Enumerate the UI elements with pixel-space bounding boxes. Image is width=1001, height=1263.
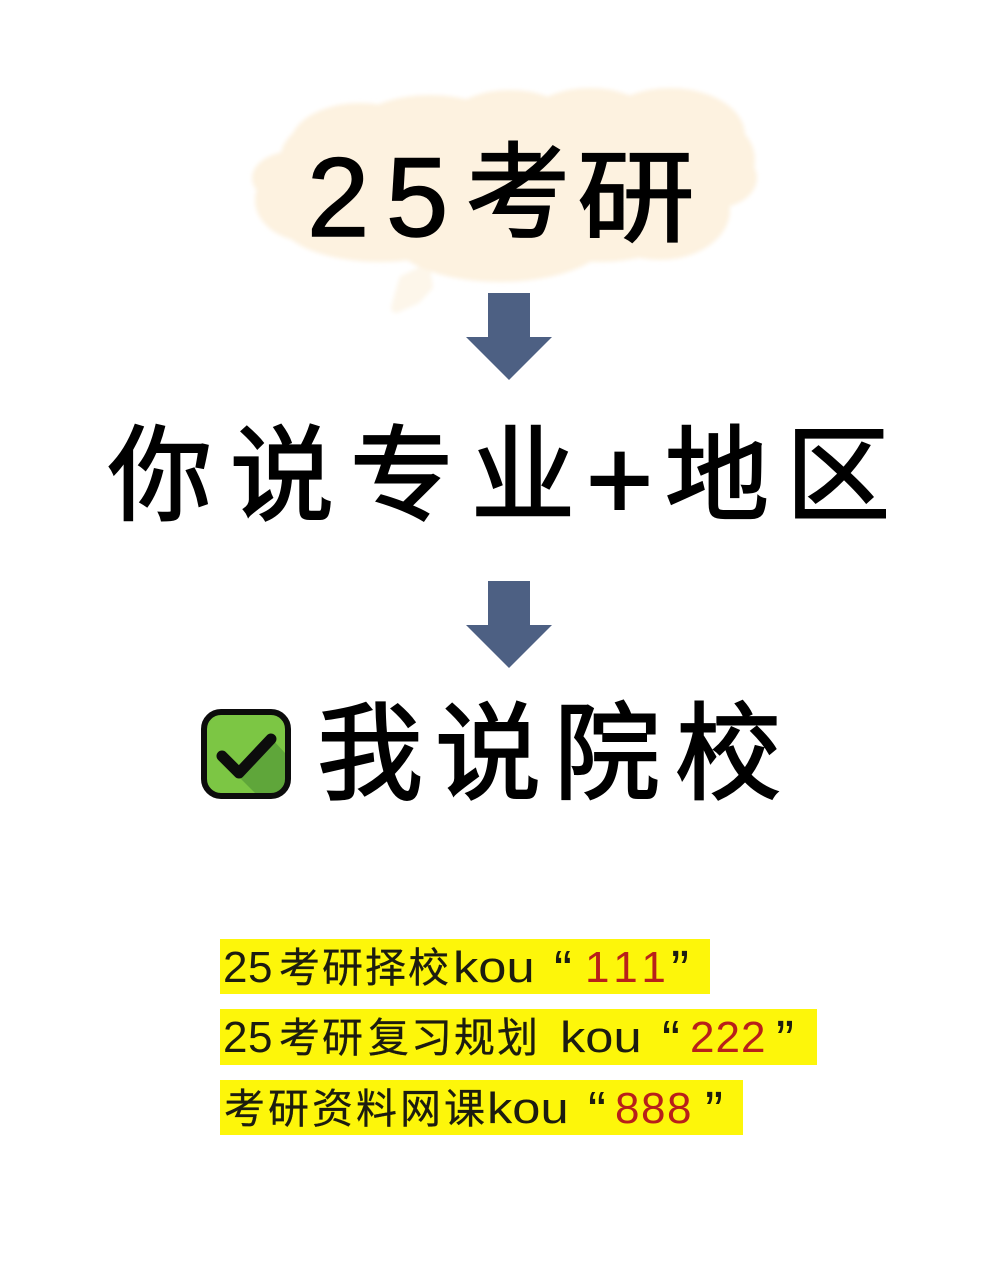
heading: I name schools: 院 xyxy=(554,696,660,814)
title: 5 xyxy=(386,135,448,260)
title: 2 xyxy=(307,135,369,260)
callout line 2: ” xyxy=(776,1010,794,1070)
callout line 1: 111 xyxy=(585,943,673,992)
heading: major and region: 专 xyxy=(350,419,454,535)
callout line 2 xyxy=(220,1009,817,1065)
heading: major and region xyxy=(108,416,890,544)
callout line 1: ” xyxy=(671,940,689,1000)
callout line 1: “ xyxy=(554,940,572,1000)
callout line 1: 考研择校 xyxy=(279,945,451,991)
callout line 3: “ xyxy=(588,1081,606,1141)
cloud background xyxy=(251,86,758,313)
heading: I name schools xyxy=(317,696,781,814)
callout line 1: kou xyxy=(453,943,535,992)
callout line 3: ” xyxy=(705,1081,723,1141)
callout line 3: kou xyxy=(487,1084,569,1133)
heading: major and region: + xyxy=(586,416,653,544)
callout line 2: 222 xyxy=(690,1013,766,1062)
title: 考 xyxy=(466,136,570,252)
title xyxy=(307,135,695,260)
heading: I name schools: 说 xyxy=(435,696,541,814)
callout line 2: 复习规划 xyxy=(368,1015,540,1061)
callout line 2: 考研 xyxy=(279,1015,365,1061)
callout line 2: “ xyxy=(662,1010,680,1070)
heading: major and region: 你 xyxy=(108,419,212,535)
heading: major and region: 区 xyxy=(786,419,890,535)
icon: green check box xyxy=(201,709,291,799)
callout line 1 xyxy=(220,939,710,994)
heading: major and region: 说 xyxy=(230,419,334,535)
callout line 2: kou xyxy=(560,1013,642,1062)
callout line 3: 考研资料网课 xyxy=(224,1086,488,1132)
heading: major and region: 业 xyxy=(471,419,575,535)
callout line 1: 25 xyxy=(223,943,273,992)
heading: major and region: 地 xyxy=(665,419,769,535)
arrow 2 xyxy=(466,581,552,668)
callout line 2: 25 xyxy=(223,1013,273,1062)
heading: I name schools: 我 xyxy=(317,696,423,814)
arrow 1 xyxy=(466,293,552,380)
title: 研 xyxy=(577,143,695,256)
callout line 3: 888 xyxy=(615,1084,693,1133)
callout line 3 xyxy=(220,1080,743,1135)
heading: I name schools: 校 xyxy=(675,696,781,814)
